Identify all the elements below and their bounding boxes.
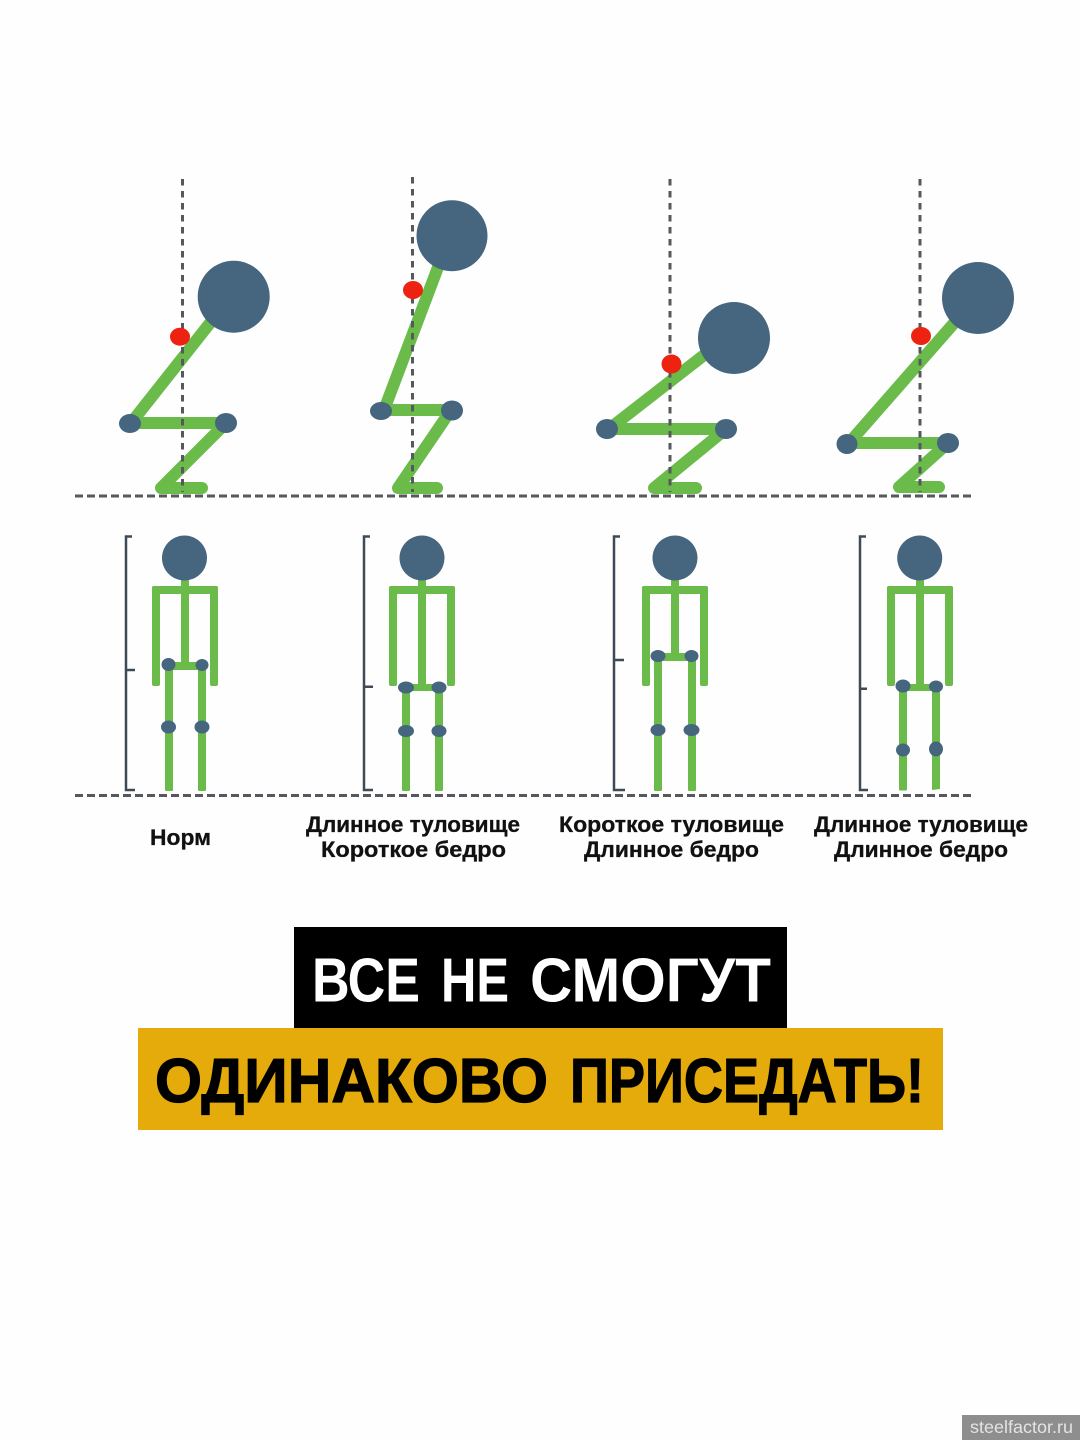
headline line 2: ОДИНАКОВО bbox=[155, 1047, 548, 1116]
label: short torso, long thigh: Длинное бедро bbox=[584, 837, 759, 862]
squat figure: short torso, long thigh bbox=[596, 179, 770, 492]
standing figure: long torso, long thigh bbox=[860, 536, 953, 790]
squat figure: long torso, long thigh bbox=[836, 179, 1014, 492]
label: long torso, short thigh bbox=[306, 812, 520, 862]
label: short torso, long thigh bbox=[559, 812, 784, 862]
headline line 1: ВСЕ bbox=[312, 946, 420, 1016]
standing figure: short torso, long thigh bbox=[614, 536, 708, 791]
label: short torso, long thigh: Короткое туловище bbox=[559, 812, 784, 837]
ground line: standing bbox=[75, 794, 972, 797]
watermark bbox=[962, 1415, 1080, 1440]
height bracket: short torso bbox=[614, 536, 625, 790]
watermark: steelfactor.ru bbox=[970, 1417, 1073, 1437]
standing figure: long torso, short thigh bbox=[364, 536, 455, 791]
label: long torso, long thigh: Длинное бедро bbox=[834, 837, 1008, 862]
label: long torso, long thigh: Длинное туловище bbox=[814, 812, 1028, 837]
label: long torso, short thigh: Короткое бедро bbox=[321, 837, 506, 862]
squat figure: norm bbox=[119, 179, 270, 492]
height bracket: long torso bbox=[364, 536, 373, 790]
label: long torso, long thigh bbox=[814, 812, 1028, 862]
headline line 1: СМОГУТ bbox=[530, 946, 771, 1016]
headline line 1 bbox=[294, 927, 787, 1029]
squat figure: long torso, short thigh bbox=[370, 177, 488, 492]
headline line 1: НЕ bbox=[441, 946, 509, 1016]
height bracket: long torso, long thigh bbox=[860, 536, 868, 790]
standing figure: norm bbox=[126, 536, 218, 791]
height bracket: norm bbox=[126, 536, 135, 790]
ground line: squats bbox=[75, 494, 972, 498]
headline line 2: ПРИСЕДАТЬ! bbox=[570, 1047, 924, 1116]
label: norm: Норм bbox=[150, 825, 211, 850]
headline line 2 bbox=[138, 1028, 943, 1130]
label: long torso, short thigh: Длинное туловище bbox=[306, 812, 520, 837]
